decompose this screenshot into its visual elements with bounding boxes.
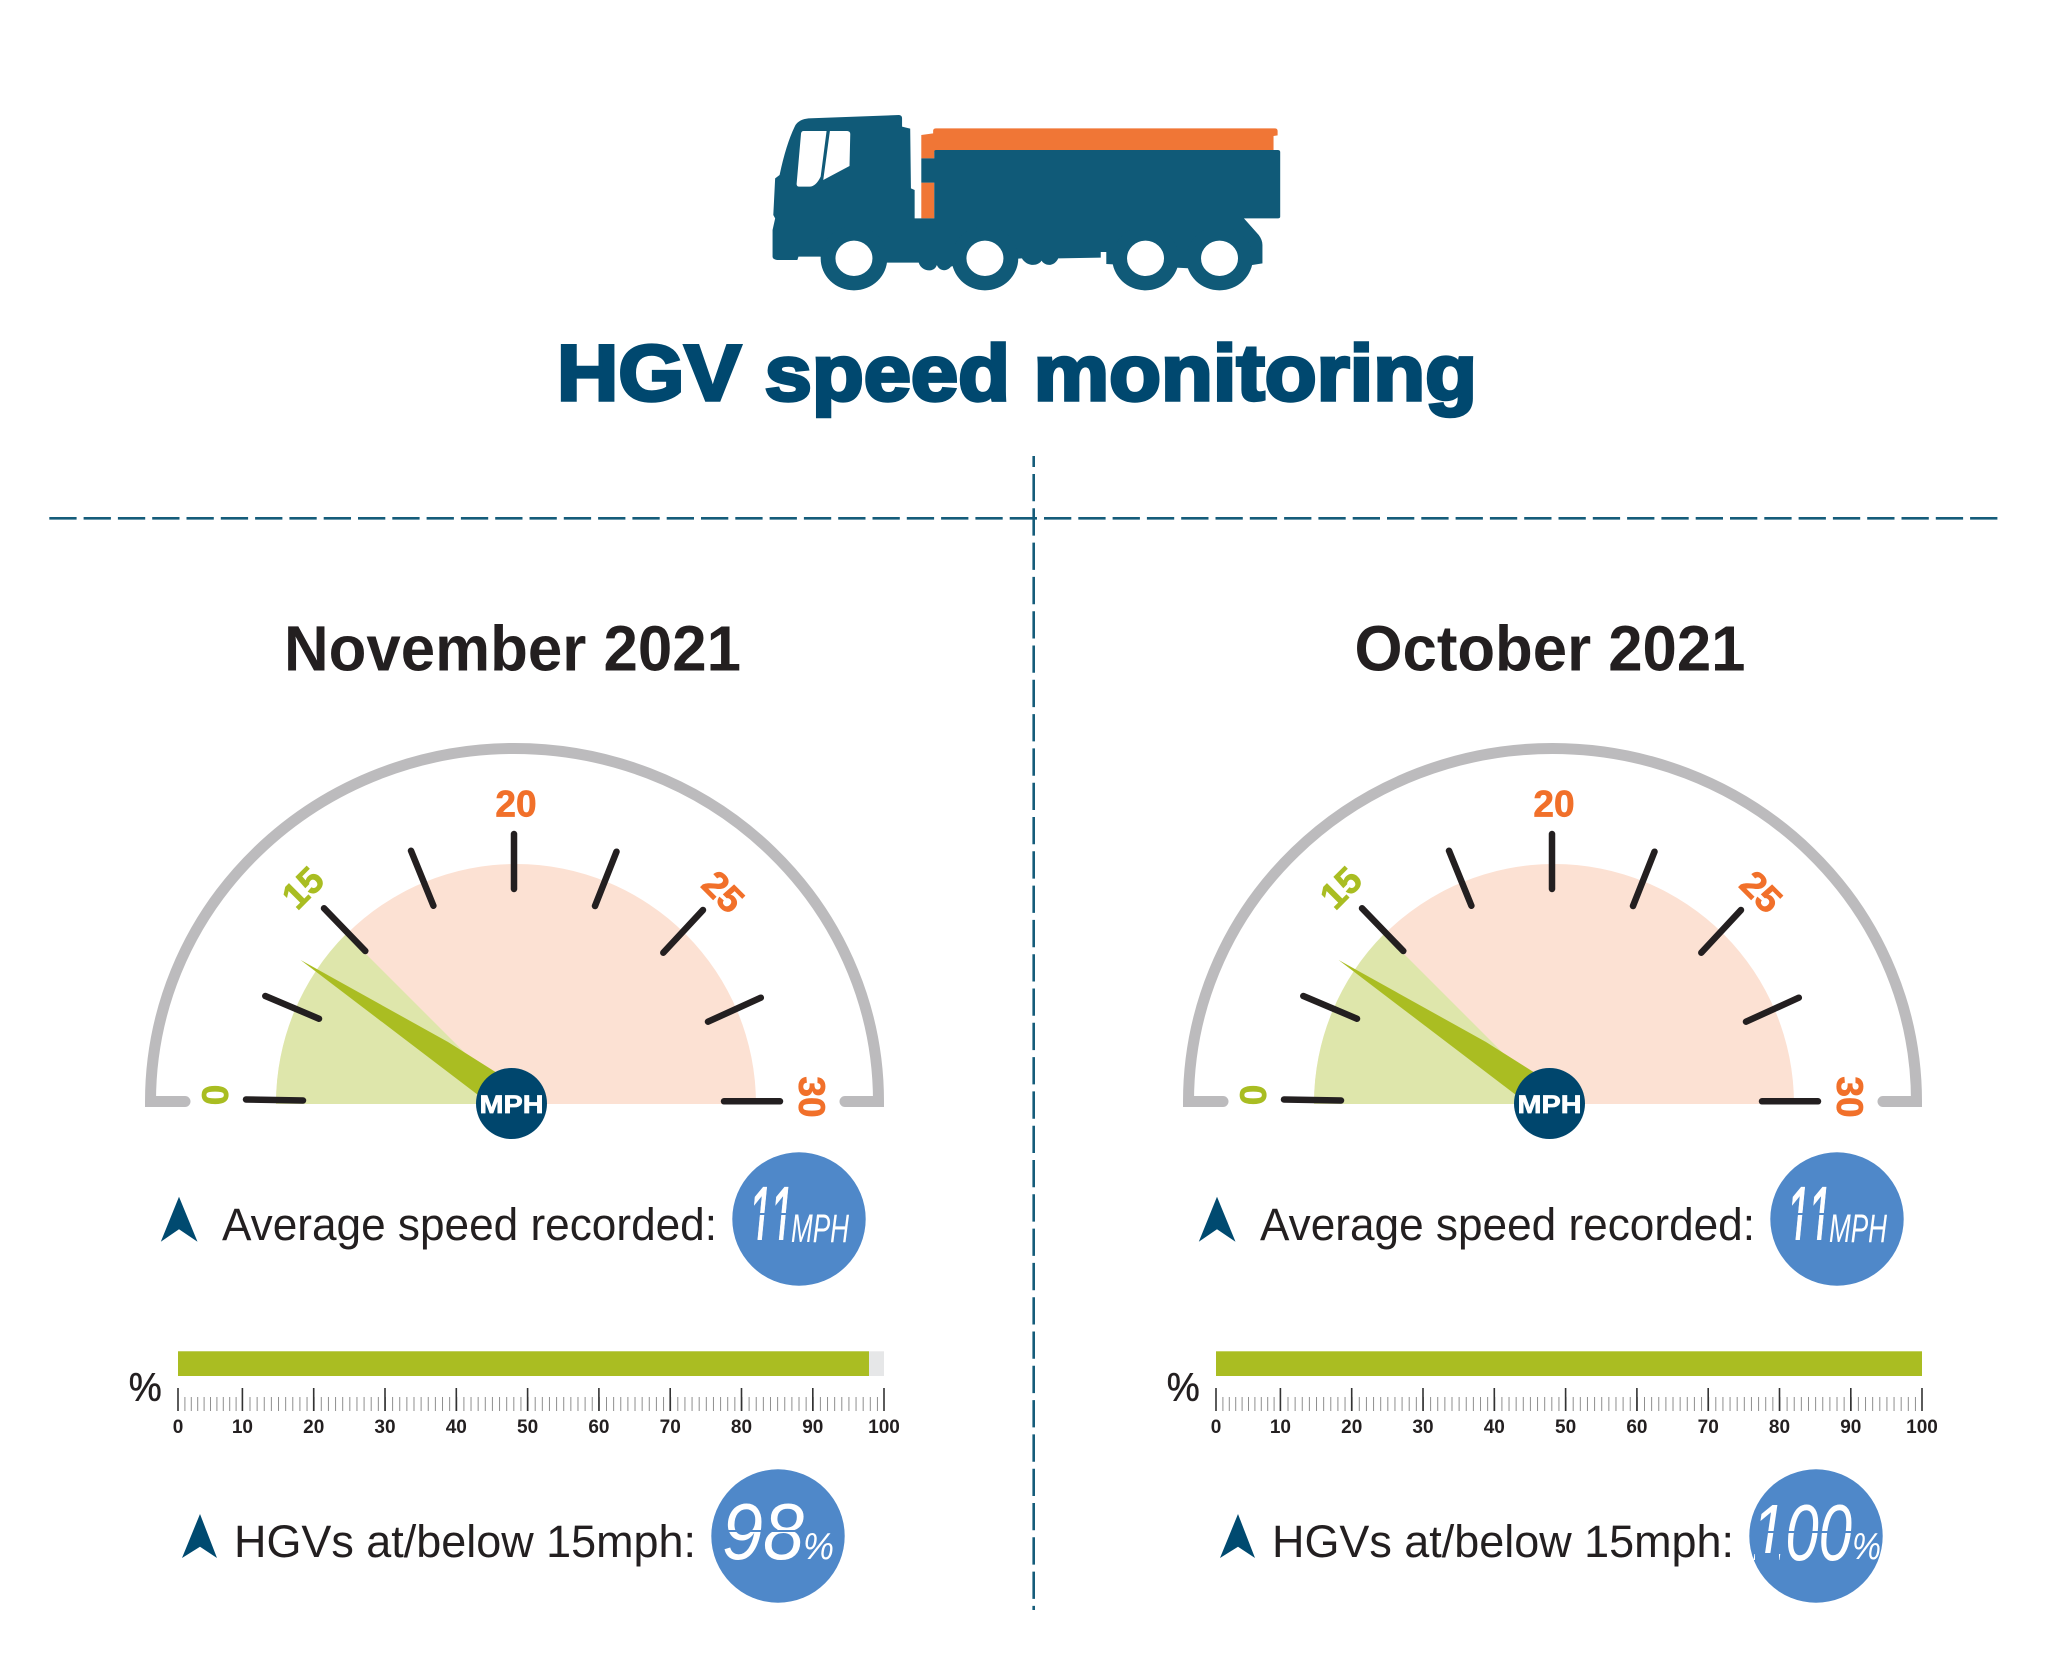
scale labels	[173, 1417, 900, 1438]
gauge label 30: 30	[1829, 1076, 1870, 1118]
average speed label: Average speed recorded:	[222, 1199, 717, 1250]
hub label MPH: MPH	[480, 1091, 544, 1119]
scale labels: 90	[1840, 1417, 1861, 1438]
gauge green zone	[1314, 934, 1554, 1104]
scale labels: 40	[1484, 1417, 1505, 1438]
truck wheels	[821, 226, 1253, 290]
gauge label 25: 25	[1732, 863, 1790, 921]
scale labels: 30	[374, 1417, 396, 1438]
scale labels: 10	[1270, 1417, 1291, 1438]
gauge label 0: 0	[1233, 1085, 1274, 1105]
scale labels: 80	[1769, 1417, 1790, 1438]
gauge hub	[1514, 1068, 1585, 1139]
average speed label: Average speed recorded:	[1260, 1199, 1755, 1250]
gauge label 15: 15	[274, 859, 332, 917]
truck orange tipper rail	[921, 128, 1278, 218]
speed badge: 11	[1786, 1168, 1832, 1267]
HGVs label: HGVs at/below 15mph:	[1272, 1516, 1734, 1567]
speedometer gauge	[1188, 748, 1916, 1139]
horizontal dashed divider	[49, 517, 2004, 520]
icon: arrow marker	[1220, 1514, 1255, 1558]
gauge peach zone	[276, 864, 756, 1104]
percent sign: %	[129, 1366, 162, 1410]
gauge green zone	[276, 934, 516, 1104]
percentage bar chart	[1167, 1351, 1938, 1438]
gauge outer arc	[150, 748, 878, 1102]
vertical dashed divider	[1032, 456, 1035, 1610]
percentage badge: 100	[1752, 1488, 1852, 1577]
percentage bar chart	[129, 1351, 900, 1438]
scale ticks	[1216, 1388, 1922, 1411]
gauge needle	[301, 960, 505, 1095]
HGVs at or below 15mph row	[1220, 1469, 1883, 1603]
bar track	[178, 1351, 884, 1376]
gauge label 20: 20	[1533, 784, 1575, 824]
bar value 100%	[1216, 1351, 1922, 1376]
speedometer gauge	[150, 748, 878, 1139]
icon: tipper truck	[773, 115, 1280, 290]
scale labels: 100	[868, 1417, 900, 1438]
scale labels: 20	[303, 1417, 324, 1438]
scale labels: 40	[446, 1417, 467, 1438]
speed badge: MPH	[1829, 1207, 1887, 1251]
hub label MPH: MPH	[1518, 1091, 1582, 1119]
scale labels: 80	[731, 1417, 752, 1438]
truck wheel hubs	[835, 241, 1238, 276]
scale labels: 70	[660, 1417, 681, 1438]
percentage badge	[1749, 1469, 1883, 1603]
truck cab windows	[797, 131, 850, 187]
title: HGV speed monitoring	[557, 328, 1477, 417]
gauge label 20: 20	[495, 784, 537, 824]
scale labels: 0	[173, 1417, 183, 1438]
scale labels: 100	[1906, 1417, 1938, 1438]
scale labels: 60	[588, 1417, 609, 1438]
gauge label 25: 25	[694, 863, 752, 921]
gauge tick marks	[246, 834, 780, 1101]
bar value 98%	[178, 1351, 869, 1376]
average speed row	[1199, 1152, 1904, 1286]
panel: November 2021	[129, 612, 900, 1603]
gauge hub	[476, 1068, 547, 1139]
percentage badge: %	[803, 1526, 834, 1568]
HGVs label: HGVs at/below 15mph:	[234, 1516, 696, 1567]
icon: arrow marker	[182, 1514, 217, 1558]
scale labels: 0	[1211, 1417, 1221, 1438]
gauge tick marks	[1284, 834, 1818, 1101]
panel: October 2021	[1167, 612, 1938, 1603]
HGVs at or below 15mph row	[182, 1469, 845, 1603]
icon: arrow marker	[1199, 1197, 1236, 1242]
scale labels: 90	[802, 1417, 823, 1438]
scale ticks	[178, 1388, 884, 1411]
scale labels: 50	[517, 1417, 538, 1438]
gauge label 30: 30	[791, 1076, 832, 1118]
percentage badge	[711, 1469, 845, 1603]
icon: arrow marker	[161, 1197, 198, 1242]
speed badge: 11	[748, 1168, 794, 1267]
percentage badge: %	[1852, 1526, 1881, 1568]
scale labels: 50	[1555, 1417, 1576, 1438]
speed badge	[1770, 1152, 1904, 1286]
speed badge	[732, 1152, 866, 1286]
gauge label 0: 0	[195, 1085, 236, 1105]
gauge peach zone	[1314, 864, 1794, 1104]
scale labels: 60	[1626, 1417, 1647, 1438]
truck blue body	[773, 115, 1280, 270]
percentage badge: 98	[722, 1487, 804, 1576]
average speed row	[161, 1152, 866, 1286]
gauge needle	[1339, 960, 1543, 1095]
gauge outer arc	[1188, 748, 1916, 1102]
heading: October 2021: October 2021	[1354, 612, 1746, 684]
scale labels: 30	[1412, 1417, 1434, 1438]
percent sign: %	[1167, 1366, 1200, 1410]
scale labels	[1211, 1417, 1938, 1438]
scale labels: 70	[1698, 1417, 1719, 1438]
scale labels: 10	[232, 1417, 253, 1438]
scale labels: 20	[1341, 1417, 1362, 1438]
speed badge: MPH	[791, 1207, 849, 1251]
heading: November 2021: November 2021	[284, 612, 741, 684]
gauge label 15: 15	[1312, 859, 1370, 917]
